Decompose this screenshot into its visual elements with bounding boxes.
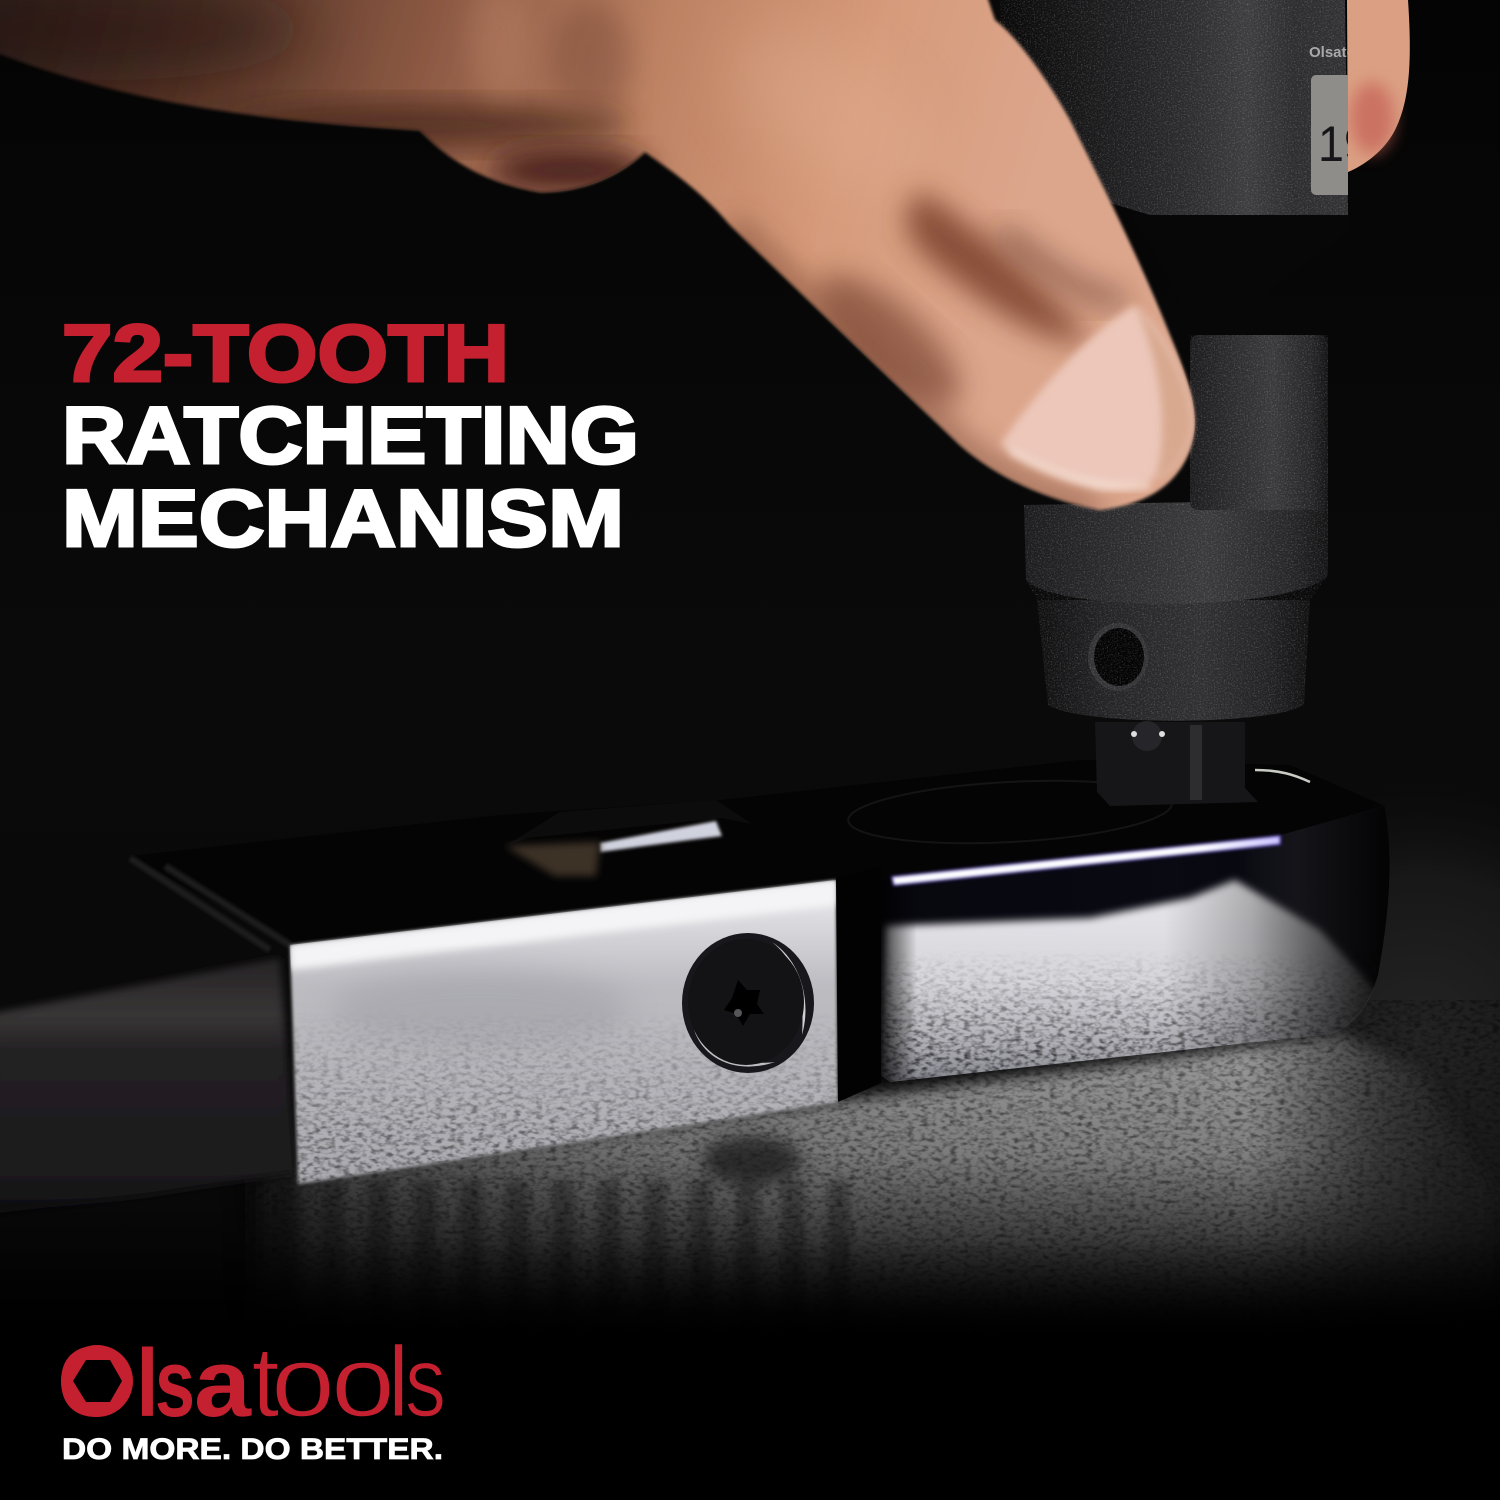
square drive anvil — [1095, 721, 1258, 806]
reversing switch — [505, 800, 752, 876]
floor fade to black — [0, 1240, 1500, 1350]
collar — [1024, 500, 1328, 604]
handle edge highlight — [130, 858, 290, 950]
lower edge shadow — [730, 225, 1100, 510]
knuckle shading — [0, 0, 310, 80]
neck joint — [1130, 215, 1348, 335]
chrome screw — [682, 933, 814, 1073]
ratchet wrench — [0, 760, 1400, 1214]
upper joint cylinder — [1190, 335, 1328, 510]
wrench top face — [130, 760, 1385, 945]
logo bold letters: a — [194, 1330, 252, 1437]
floor reflection of the ratchet — [264, 1000, 1500, 1299]
glint on head rim — [1255, 770, 1310, 782]
headline line 2: RATCHETING — [62, 391, 639, 481]
fine socket speckle — [1000, 0, 1350, 730]
size number: 19 — [1318, 116, 1370, 172]
universal impact socket — [990, 0, 1410, 806]
logo light letters: l — [388, 1326, 410, 1438]
cross pin hole — [1088, 623, 1148, 691]
headline line 3: MECHANISM — [62, 474, 624, 564]
size plate — [1311, 75, 1348, 195]
socket logo text: Olsatools — [1309, 44, 1377, 61]
logo light letters: s — [405, 1326, 446, 1438]
handle side — [0, 958, 296, 1214]
lower socket body — [1037, 600, 1310, 721]
chrome yoke block — [280, 870, 850, 1190]
socket brand text — [1310, 46, 1348, 195]
logo mark: O with hexagon: O — [57, 1326, 135, 1438]
thumbnail — [1000, 305, 1192, 490]
gap between block and head — [836, 866, 881, 1102]
logo bold letters: l — [136, 1330, 158, 1437]
logo: Olsatools — [57, 1326, 446, 1438]
thumb joint creases — [906, 190, 1090, 342]
polished silver face — [880, 880, 1385, 1090]
logo light letters: o — [331, 1326, 395, 1438]
headline — [62, 309, 639, 564]
logo light letters: o — [271, 1326, 335, 1438]
ratchet head chrome — [880, 800, 1400, 1090]
tagline: DO MORE. DO BETTER. — [62, 1433, 443, 1466]
logo bold letters: s — [155, 1330, 195, 1437]
logo light letters: t — [252, 1326, 280, 1438]
purple-white highlight line — [892, 836, 1280, 885]
floor black base — [0, 1350, 1500, 1500]
top socket body — [990, 0, 1348, 215]
second finger behind socket — [1347, 0, 1410, 172]
ratchet head top ring — [847, 774, 1173, 850]
headline line 1: 72-TOOTH — [62, 309, 509, 399]
hand and thumb — [0, 0, 1195, 510]
